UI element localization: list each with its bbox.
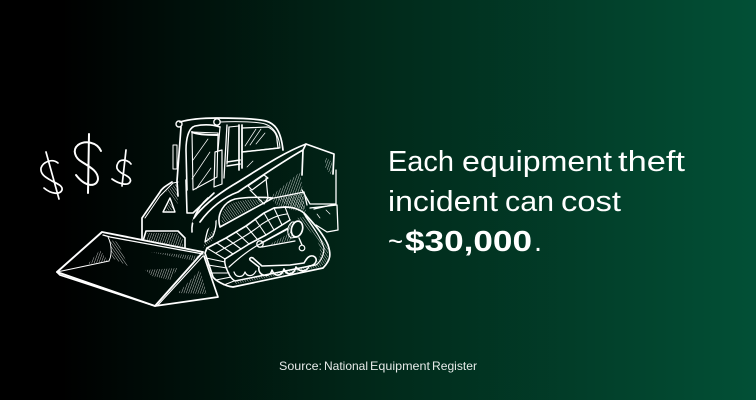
line 2: can: [505, 186, 554, 218]
bucket: [57, 232, 218, 306]
line 1: equipment: [462, 146, 612, 178]
source note: [279, 359, 477, 373]
source note: National: [324, 359, 368, 373]
rear fender hatch: [270, 172, 306, 214]
source note: Source:: [279, 359, 322, 373]
line 3 with highlighted figure: $30,000: [405, 226, 532, 258]
lift arm and rear housing: [192, 144, 338, 232]
headline text: [388, 146, 685, 258]
line 3 with highlighted figure: .: [534, 226, 542, 258]
drive sprocket and idlers: [288, 222, 298, 238]
icon: dollar signs: [41, 134, 131, 199]
icon: left dollar sign: [41, 152, 62, 199]
line 2: cost: [561, 186, 621, 218]
line 2: incident: [388, 186, 498, 218]
line 3 with highlighted figure: [388, 226, 542, 258]
illustration: skid steer loader: [57, 118, 338, 306]
line 1: Each: [388, 146, 454, 178]
track rollers: [234, 256, 316, 276]
icon: right dollar sign: [112, 150, 131, 186]
line 3 with highlighted figure: ~: [388, 226, 403, 258]
fender: [219, 197, 273, 227]
line 1: theft: [618, 146, 685, 178]
line 1: [388, 146, 685, 178]
cab: [173, 118, 283, 196]
side body: [142, 180, 216, 250]
track cleats: [206, 207, 290, 285]
source note: Equipment: [370, 359, 431, 373]
line 2: [388, 186, 621, 218]
glass reflections: [192, 129, 265, 189]
source note: Register: [432, 359, 477, 373]
icon: middle dollar sign: [75, 134, 101, 193]
track: [205, 206, 330, 287]
